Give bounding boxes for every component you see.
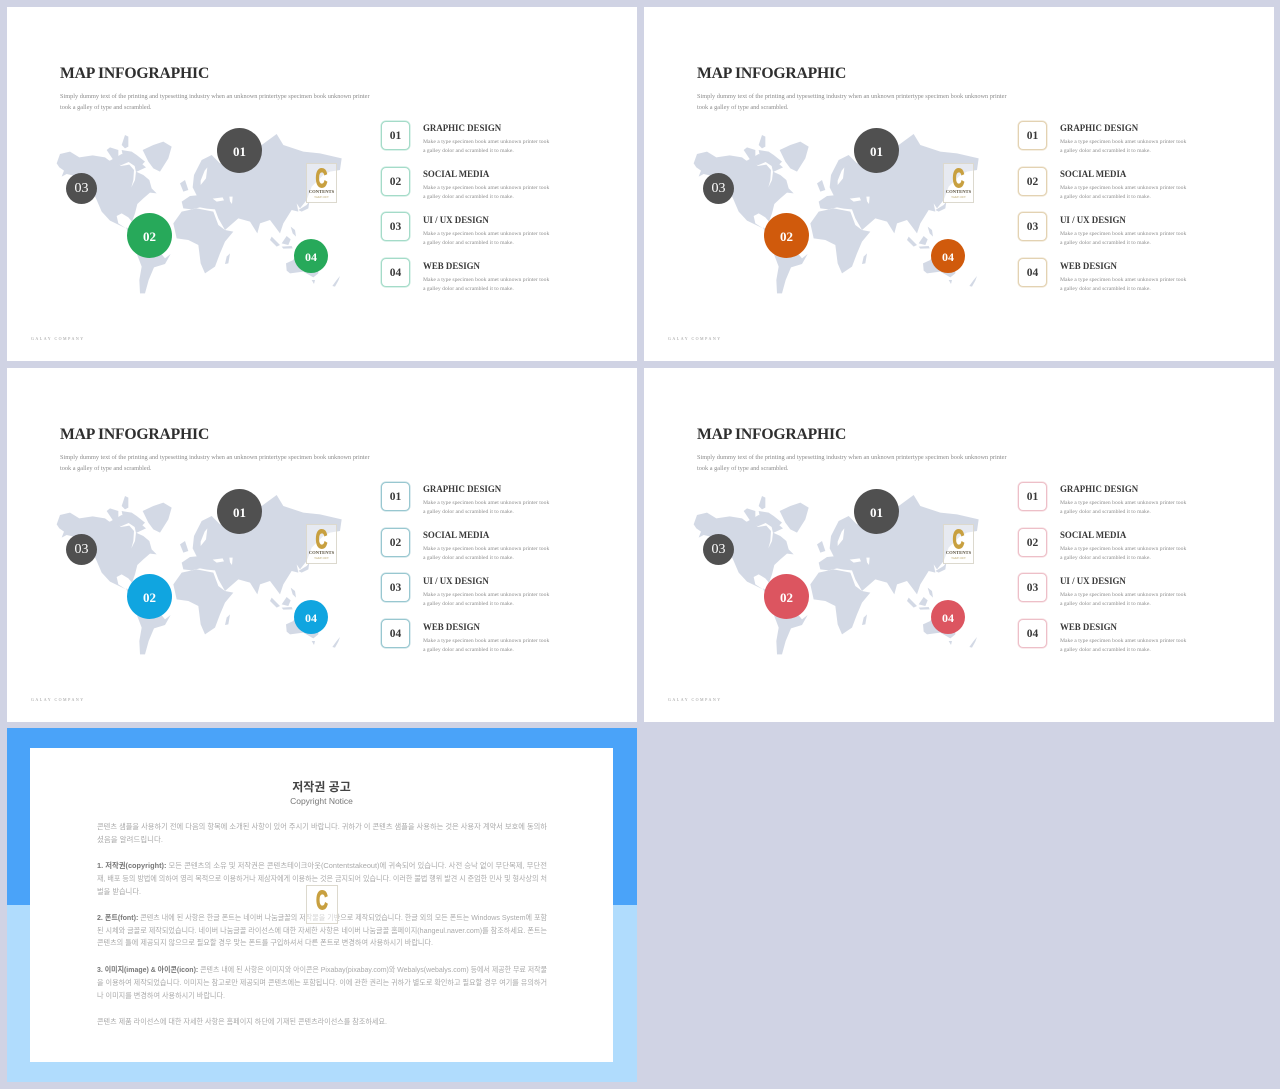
- watermark logo: C: [953, 524, 964, 554]
- marker 01: [217, 128, 262, 173]
- description: took a galley of type and scrambled.: [60, 104, 151, 110]
- item 01 heading: GRAPHIC DESIGN: [423, 484, 501, 494]
- title: MAP INFOGRAPHIC: [697, 426, 846, 443]
- panel: green map slide: [7, 7, 637, 361]
- watermark logo: CONTENTS: [946, 189, 971, 194]
- item 04 text: a galley dolor and scrambled it to make.: [423, 647, 514, 653]
- item 01 text: a galley dolor and scrambled it to make.: [423, 509, 514, 515]
- item 02 text: [1060, 546, 1186, 561]
- notice sheet: [30, 748, 613, 1062]
- item 02 number: 02: [1027, 537, 1038, 549]
- marker 04: 04: [305, 611, 317, 625]
- item 01 number: [381, 482, 410, 511]
- item 04 heading: WEB DESIGN: [423, 622, 480, 632]
- item 03 number: [381, 212, 410, 241]
- item 01 text: a galley dolor and scrambled it to make.: [1060, 509, 1151, 515]
- notice body: 3. 이미지(image) & 아이콘(icon): 콘텐츠 내에 된 사항은 이미지와 아이콘은 Pixabay(pixabay.com)와 Webalys(webalys.com) 등에서 제공한 무료 저작물: [97, 964, 547, 974]
- description: took a galley of type and scrambled.: [697, 464, 788, 472]
- item 01 text: [1060, 139, 1186, 154]
- item 01 number: 01: [1027, 491, 1038, 503]
- item 03 text: a galley dolor and scrambled it to make.: [1060, 601, 1151, 607]
- item 04 number: 04: [1027, 628, 1038, 640]
- marker 03: 03: [712, 542, 726, 557]
- item 02 heading: SOCIAL MEDIA: [423, 530, 489, 540]
- marker 01: [854, 128, 899, 173]
- watermark logo: TAKE OUT: [951, 556, 966, 560]
- marker 04: 04: [942, 611, 954, 625]
- marker 02: [764, 213, 809, 258]
- item 03 text: [1060, 231, 1186, 246]
- item 04 number: 04: [390, 628, 401, 640]
- watermark logo: [943, 524, 974, 564]
- item 03 number: 03: [1027, 221, 1038, 233]
- item 04 text: Make a type specimen book amet unknown printer took: [423, 277, 549, 283]
- item 04 heading: WEB DESIGN: [423, 261, 480, 271]
- item 02 text: a galley dolor and scrambled it to make.: [1060, 194, 1151, 200]
- item 04 text: [1060, 638, 1186, 653]
- world map: [56, 134, 342, 294]
- item 03 text: Make a type specimen book amet unknown printer took: [423, 231, 549, 237]
- item 02 text: [1060, 185, 1186, 200]
- notice body: [97, 821, 547, 1026]
- item 03 heading: UI / UX DESIGN: [423, 215, 489, 225]
- item 02 heading: SOCIAL MEDIA: [1060, 169, 1126, 179]
- panel: orange map slide: [644, 7, 1274, 361]
- item 04 text: Make a type specimen book amet unknown printer took: [423, 638, 549, 644]
- watermark logo: [306, 163, 337, 203]
- notice heading: 저작권 공고: [292, 779, 351, 794]
- item 03 text: a galley dolor and scrambled it to make.: [423, 240, 514, 246]
- item 04 text: [423, 277, 550, 292]
- title: MAP INFOGRAPHIC: [60, 426, 209, 443]
- item 03 text: [1060, 592, 1186, 607]
- item 04 text: [423, 638, 550, 653]
- item 04 text: a galley dolor and scrambled it to make.: [1060, 286, 1151, 292]
- notice body: 2. 폰트(font): 콘텐츠 내에 된 사항은 한글 폰트는 네이버 나눔글꼴의 저작물을 기반으로 제작되었습니다. 한글 외의 모든 폰트는 Windows System에 포함: [97, 912, 547, 922]
- watermark logo: C: [316, 163, 327, 193]
- marker 01: 01: [233, 144, 246, 159]
- item 04 number: [381, 619, 410, 648]
- footer: GALAY COMPANY: [31, 697, 85, 702]
- item 04 number: [1018, 619, 1047, 648]
- notice body: 벌을 받습니다.: [97, 886, 141, 896]
- watermark logo: C: [953, 163, 964, 193]
- notice text: [97, 779, 547, 1026]
- item 02 number: 02: [390, 537, 401, 549]
- panel: copyright notice: [7, 728, 637, 1082]
- item 01 text: Make a type specimen book amet unknown printer took: [423, 139, 549, 145]
- marker 04: [294, 239, 328, 273]
- item 03 number: 03: [1027, 582, 1038, 594]
- watermark logo: CONTENTS: [946, 550, 971, 555]
- watermark logo: TAKE OUT: [951, 195, 966, 199]
- watermark logo: [306, 524, 337, 564]
- description: [60, 454, 370, 472]
- panel: red map slide: [644, 368, 1274, 722]
- marker 03: 03: [74, 542, 88, 557]
- item 01 text: a galley dolor and scrambled it to make.: [423, 148, 514, 154]
- item 02 number: [381, 528, 410, 557]
- marker 03: [66, 534, 97, 565]
- item 01 heading: GRAPHIC DESIGN: [1060, 484, 1138, 494]
- marker 04: [931, 239, 965, 273]
- notice body: 을 이용하여 제작되었습니다. 이미지는 참고로만 제공되며 콘텐츠에는 포함됩니다. 이에 관한 권리는 귀하가 별도로 확인하고 필요할 경우 여기를 유의하거: [97, 977, 547, 987]
- item 03 number: 03: [390, 582, 401, 594]
- description: [697, 93, 1007, 110]
- notice body: 콘텐츠 샘플을 사용하기 전에 다음의 항목에 소개된 사항이 있어 주시기 바랍니다. 귀하가 이 콘텐츠 샘플을 사용하는 것은 사용자 계약서 보호에 동의하: [97, 821, 547, 831]
- marker 02: [764, 574, 809, 619]
- panel: blue map slide: [7, 368, 637, 722]
- marker 01: 01: [870, 505, 883, 520]
- title: MAP INFOGRAPHIC: [60, 65, 209, 82]
- item 02 heading: SOCIAL MEDIA: [1060, 530, 1126, 540]
- item 02 text: Make a type specimen book amet unknown printer took: [1060, 185, 1186, 191]
- marker 03: 03: [712, 181, 726, 196]
- description: Simply dummy text of the printing and typesetting industry when an unknown printertype specimen book unknown printer: [697, 454, 1007, 461]
- item 01 text: a galley dolor and scrambled it to make.: [1060, 148, 1151, 154]
- item 03 number: [1018, 573, 1047, 602]
- marker 02: 02: [143, 229, 156, 244]
- footer: GALAY COMPANY: [31, 336, 85, 341]
- item 04 text: a galley dolor and scrambled it to make.: [1060, 647, 1151, 653]
- footer: GALAY COMPANY: [668, 336, 722, 341]
- world map: [694, 495, 979, 654]
- item 01 text: [1060, 500, 1186, 515]
- marker 03: [703, 173, 734, 204]
- item 02 number: [381, 167, 410, 196]
- item 03 heading: UI / UX DESIGN: [423, 576, 489, 586]
- notice body: 셨음을 알려드립니다.: [97, 834, 163, 844]
- watermark logo: TAKE OUT: [314, 556, 329, 560]
- watermark logo: CONTENTS: [309, 189, 334, 194]
- item 03 heading: UI / UX DESIGN: [1060, 215, 1126, 225]
- item 03 heading: UI / UX DESIGN: [1060, 576, 1126, 586]
- item 01 text: [423, 500, 550, 515]
- marker 04: [294, 600, 328, 634]
- notice body: 재, 배포 등의 방법에 의하여 영리 목적으로 이용하거나 제삼자에게 이용하는 것은 금지되어 있습니다. 이러한 불법 행위 발견 시 준엄한 민사 및 형사상의 처: [97, 873, 547, 883]
- item 04 text: [1060, 277, 1186, 292]
- item 02 text: Make a type specimen book amet unknown printer took: [1060, 546, 1186, 552]
- watermark logo: C: [316, 524, 327, 554]
- watermark logo: [943, 163, 974, 203]
- marker 03: [66, 173, 97, 204]
- notice body: 된 시체와 글꼴로 제작되었습니다. 네이버 나눔글꼴 라이선스에 대한 자세한 사항은 네이버 나눔글꼴 홈페이지(hangeul.naver.com)를 참조하세요. 폰트는: [97, 925, 547, 935]
- item 03 text: Make a type specimen book amet unknown printer took: [1060, 231, 1186, 237]
- item 03 text: Make a type specimen book amet unknown printer took: [423, 592, 549, 598]
- description: Simply dummy text of the printing and typesetting industry when an unknown printertype specimen book unknown printer: [60, 93, 370, 100]
- item 03 number: [381, 573, 410, 602]
- description: [60, 93, 370, 110]
- title: MAP INFOGRAPHIC: [697, 65, 846, 82]
- item 01 text: [423, 139, 550, 154]
- marker 01: [217, 489, 262, 534]
- item 01 number: 01: [390, 491, 401, 503]
- notice subheading: Copyright Notice: [290, 796, 353, 806]
- marker 02: [127, 574, 172, 619]
- item 01 number: [1018, 482, 1047, 511]
- item 02 number: [1018, 167, 1047, 196]
- world map: [56, 495, 342, 654]
- item 01 number: [381, 121, 410, 150]
- item 01 number: [1018, 121, 1047, 150]
- item 02 number: [1018, 528, 1047, 557]
- marker 01: 01: [233, 505, 246, 520]
- world map: [694, 134, 979, 294]
- watermark logo: CONTENTS: [309, 550, 334, 555]
- notice body: 1. 저작권(copyright): 모든 콘텐츠의 소유 및 저작권은 콘텐츠테이크아웃(Contentstakeout)에 귀속되어 있습니다. 사전 승낙 없이 무단복제, 무단전: [97, 860, 547, 870]
- item 04 number: 04: [390, 267, 401, 279]
- item 03 text: a galley dolor and scrambled it to make.: [423, 601, 514, 607]
- notice body: 콘텐츠 제품 라이선스에 대한 자세한 사항은 홈페이지 하단에 기재된 콘텐츠라이선스를 참조하세요.: [97, 1016, 387, 1026]
- item 04 text: Make a type specimen book amet unknown printer took: [1060, 277, 1186, 283]
- item 03 text: a galley dolor and scrambled it to make.: [1060, 240, 1151, 246]
- watermark logo: TAKE OUT: [314, 195, 329, 199]
- marker 04: 04: [305, 250, 317, 264]
- item 02 text: [423, 185, 550, 200]
- item 03 text: [423, 592, 550, 607]
- description: Simply dummy text of the printing and typesetting industry when an unknown printertype specimen book unknown printer: [60, 454, 370, 461]
- item 01 number: 01: [390, 130, 401, 142]
- item 02 heading: SOCIAL MEDIA: [423, 169, 489, 179]
- item 01 text: Make a type specimen book amet unknown printer took: [423, 500, 549, 506]
- marker 03: 03: [74, 181, 88, 196]
- item 04 number: [1018, 258, 1047, 287]
- item 02 text: Make a type specimen book amet unknown printer took: [423, 185, 549, 191]
- item 01 heading: GRAPHIC DESIGN: [423, 123, 501, 133]
- marker 04: [931, 600, 965, 634]
- item 02 number: 02: [390, 176, 401, 188]
- item 02 number: 02: [1027, 176, 1038, 188]
- marker 02: 02: [143, 590, 156, 605]
- marker 04: 04: [942, 250, 954, 264]
- item 04 heading: WEB DESIGN: [1060, 261, 1117, 271]
- item 04 text: Make a type specimen book amet unknown printer took: [1060, 638, 1186, 644]
- item 03 text: [423, 231, 550, 246]
- item 03 number: 03: [390, 221, 401, 233]
- description: took a galley of type and scrambled.: [697, 104, 788, 110]
- item 04 text: a galley dolor and scrambled it to make.: [423, 286, 514, 292]
- item 01 text: Make a type specimen book amet unknown printer took: [1060, 139, 1186, 145]
- blue background band: [7, 728, 637, 905]
- marker 01: [854, 489, 899, 534]
- description: Simply dummy text of the printing and typesetting industry when an unknown printertype specimen book unknown printer: [697, 93, 1007, 100]
- marker 03: [703, 534, 734, 565]
- notice body: 나 이미지를 변경하여 사용하시기 바랍니다.: [97, 990, 225, 1000]
- item 04 heading: WEB DESIGN: [1060, 622, 1117, 632]
- item 02 text: a galley dolor and scrambled it to make.: [423, 555, 514, 561]
- footer: GALAY COMPANY: [668, 697, 722, 702]
- item 02 text: [423, 546, 550, 561]
- watermark logo: [306, 885, 338, 924]
- item 02 text: a galley dolor and scrambled it to make.: [423, 194, 514, 200]
- description: [697, 454, 1007, 472]
- marker 01: 01: [870, 144, 883, 159]
- marker 02: 02: [780, 229, 793, 244]
- item 02 text: Make a type specimen book amet unknown printer took: [423, 546, 549, 552]
- marker 02: [127, 213, 172, 258]
- notice body: 콘텐츠의 틀에 제공되지 않으므로 필요할 경우 맞는 폰트를 구입하셔서 다른 폰트로 변경하여 사용하시기 바랍니다.: [97, 937, 433, 947]
- item 01 number: 01: [1027, 130, 1038, 142]
- item 03 text: Make a type specimen book amet unknown printer took: [1060, 592, 1186, 598]
- item 04 number: 04: [1027, 267, 1038, 279]
- item 01 text: Make a type specimen book amet unknown printer took: [1060, 500, 1186, 506]
- description: took a galley of type and scrambled.: [60, 464, 151, 472]
- watermark logo: C: [316, 885, 328, 915]
- item 02 text: a galley dolor and scrambled it to make.: [1060, 555, 1151, 561]
- item 04 number: [381, 258, 410, 287]
- item 03 number: [1018, 212, 1047, 241]
- marker 02: 02: [780, 590, 793, 605]
- item 01 heading: GRAPHIC DESIGN: [1060, 123, 1138, 133]
